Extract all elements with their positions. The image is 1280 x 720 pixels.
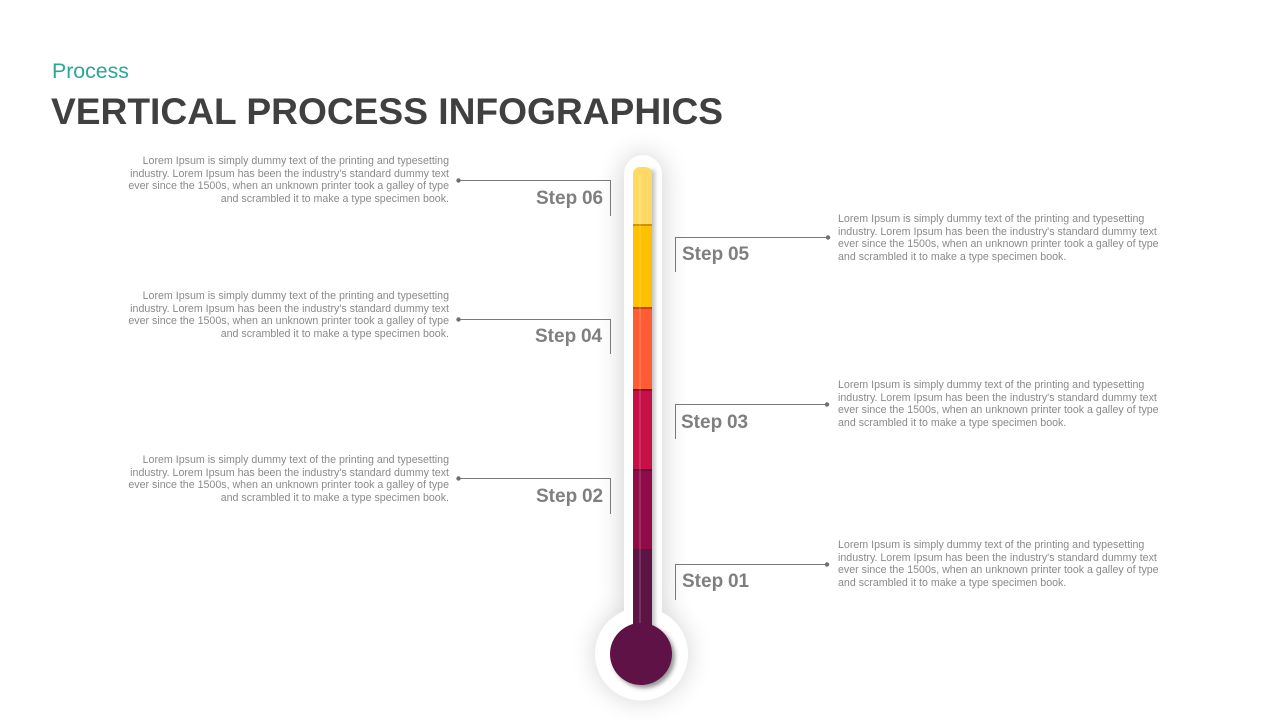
- step 02 description: ever since the 1500s, when an unknown printer took a galley of type: [128, 479, 449, 491]
- step 01 description: and scrambled it to make a type specimen book.: [838, 577, 1066, 589]
- step 01 label: Step 01: [682, 570, 749, 592]
- step 03 description: and scrambled it to make a type specimen book.: [838, 417, 1066, 429]
- step 05 description: ever since the 1500s, when an unknown printer took a galley of type: [838, 238, 1159, 250]
- step 04 label: Step 04: [535, 326, 602, 346]
- step 02 description: [128, 454, 449, 504]
- step 03 description: Lorem Ipsum is simply dummy text of the printing and typesetting: [838, 379, 1144, 391]
- step 03 description: ever since the 1500s, when an unknown printer took a galley of type: [838, 404, 1159, 416]
- step 06 description: Lorem Ipsum is simply dummy text of the printing and typesetting: [143, 155, 449, 167]
- step 06 description: industry. Lorem Ipsum has been the industry's standard dummy text: [130, 168, 449, 180]
- step 04 description: industry. Lorem Ipsum has been the industry's standard dummy text: [130, 303, 449, 315]
- step 03 description: industry. Lorem Ipsum has been the industry's standard dummy text: [838, 392, 1157, 404]
- step 01 description: [838, 539, 1159, 589]
- step 03 label: Step 03: [681, 412, 748, 432]
- eyebrow: Process: Process: [52, 59, 129, 83]
- step 06 label: Step 06: [536, 188, 603, 208]
- step 06 description: ever since the 1500s, when an unknown printer took a galley of type: [128, 180, 449, 192]
- connector lines and dots: [456, 178, 830, 600]
- step 04 description: and scrambled it to make a type specimen book.: [221, 328, 449, 340]
- step 06 description: and scrambled it to make a type specimen book.: [221, 193, 449, 205]
- step 01 description: ever since the 1500s, when an unknown printer took a galley of type: [838, 564, 1159, 576]
- step 01 description: Lorem Ipsum is simply dummy text of the printing and typesetting: [838, 539, 1144, 551]
- step 04 description: ever since the 1500s, when an unknown printer took a galley of type: [128, 315, 449, 327]
- step 05 description: industry. Lorem Ipsum has been the industry's standard dummy text: [838, 226, 1157, 238]
- step 02 label: Step 02: [536, 486, 603, 506]
- title: VERTICAL PROCESS INFOGRAPHICS: [51, 90, 723, 132]
- step 04 description: Lorem Ipsum is simply dummy text of the printing and typesetting: [143, 290, 449, 302]
- step 01 description: industry. Lorem Ipsum has been the industry's standard dummy text: [838, 552, 1157, 564]
- step 03 description: [838, 379, 1159, 429]
- step 05 description: and scrambled it to make a type specimen book.: [838, 251, 1066, 263]
- step 05 label: Step 05: [682, 244, 749, 264]
- thermometer graphic: [586, 148, 697, 710]
- step 05 description: [838, 213, 1159, 263]
- step 02 description: and scrambled it to make a type specimen book.: [221, 492, 449, 504]
- step 06 description: [128, 155, 449, 205]
- step 05 description: Lorem Ipsum is simply dummy text of the printing and typesetting: [838, 213, 1144, 225]
- step 04 description: [128, 290, 449, 340]
- step 02 description: Lorem Ipsum is simply dummy text of the printing and typesetting: [143, 454, 449, 466]
- step 02 description: industry. Lorem Ipsum has been the industry's standard dummy text: [130, 467, 449, 479]
